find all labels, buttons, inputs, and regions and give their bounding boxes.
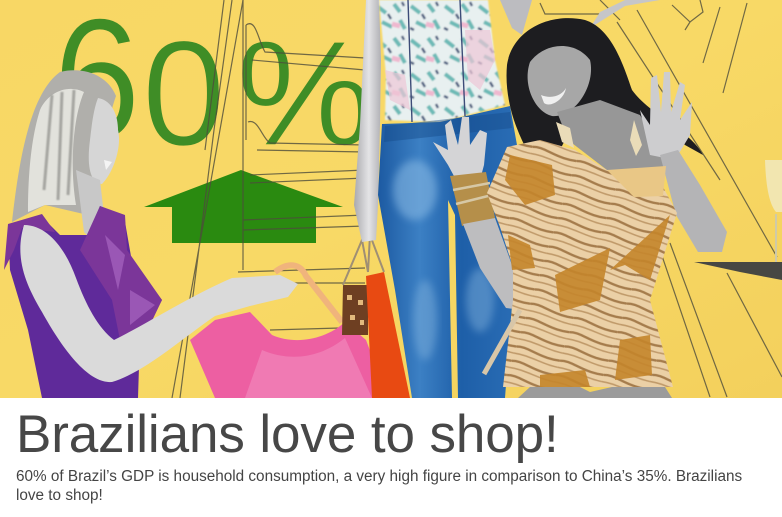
big green 60% figure	[53, 0, 374, 177]
illustration: Brazilians shopping collage	[0, 0, 782, 398]
hair	[12, 70, 116, 222]
body text: 60% of Brazil’s GDP is household consumption, a very high figure in comparison to China’s 35%. Brazilians love to shop!	[16, 468, 742, 504]
woman in animal print, right	[433, 18, 727, 398]
big green 60% figure: 0	[142, 9, 225, 177]
hair	[507, 18, 703, 175]
line drawing of shelves	[172, 0, 782, 398]
pink blouse on hanger	[190, 265, 388, 398]
left forearm	[463, 218, 522, 310]
jeans	[378, 106, 517, 398]
neck	[76, 170, 120, 270]
neck and chest	[557, 100, 672, 170]
stripe sash	[484, 310, 520, 374]
face	[528, 46, 591, 116]
arm	[20, 225, 298, 382]
shopping bags	[342, 235, 410, 398]
face	[89, 98, 119, 184]
yellow background	[0, 0, 782, 398]
raised left hand	[433, 117, 487, 180]
right arm	[660, 150, 727, 252]
smile	[541, 88, 566, 105]
legs	[518, 387, 672, 398]
floral top	[379, 0, 505, 122]
icon: green up arrow	[144, 170, 343, 243]
smile	[104, 160, 112, 170]
earrings	[556, 120, 642, 156]
big green 60% figure: %	[236, 9, 374, 177]
orange print patches	[505, 155, 670, 387]
mannequin raised arm	[500, 0, 532, 35]
mannequin left arm	[354, 0, 381, 242]
raised right hand	[640, 72, 692, 160]
inner top	[607, 166, 666, 197]
tray with champagne glass	[694, 160, 782, 280]
bracelets	[450, 172, 495, 226]
ruffles	[4, 206, 162, 340]
mannequin with jeans	[354, 0, 660, 398]
title: Brazilians love to shop!	[16, 405, 559, 464]
animal print dress	[487, 140, 677, 387]
woman in purple, left	[4, 70, 298, 398]
purple dress	[8, 206, 162, 398]
